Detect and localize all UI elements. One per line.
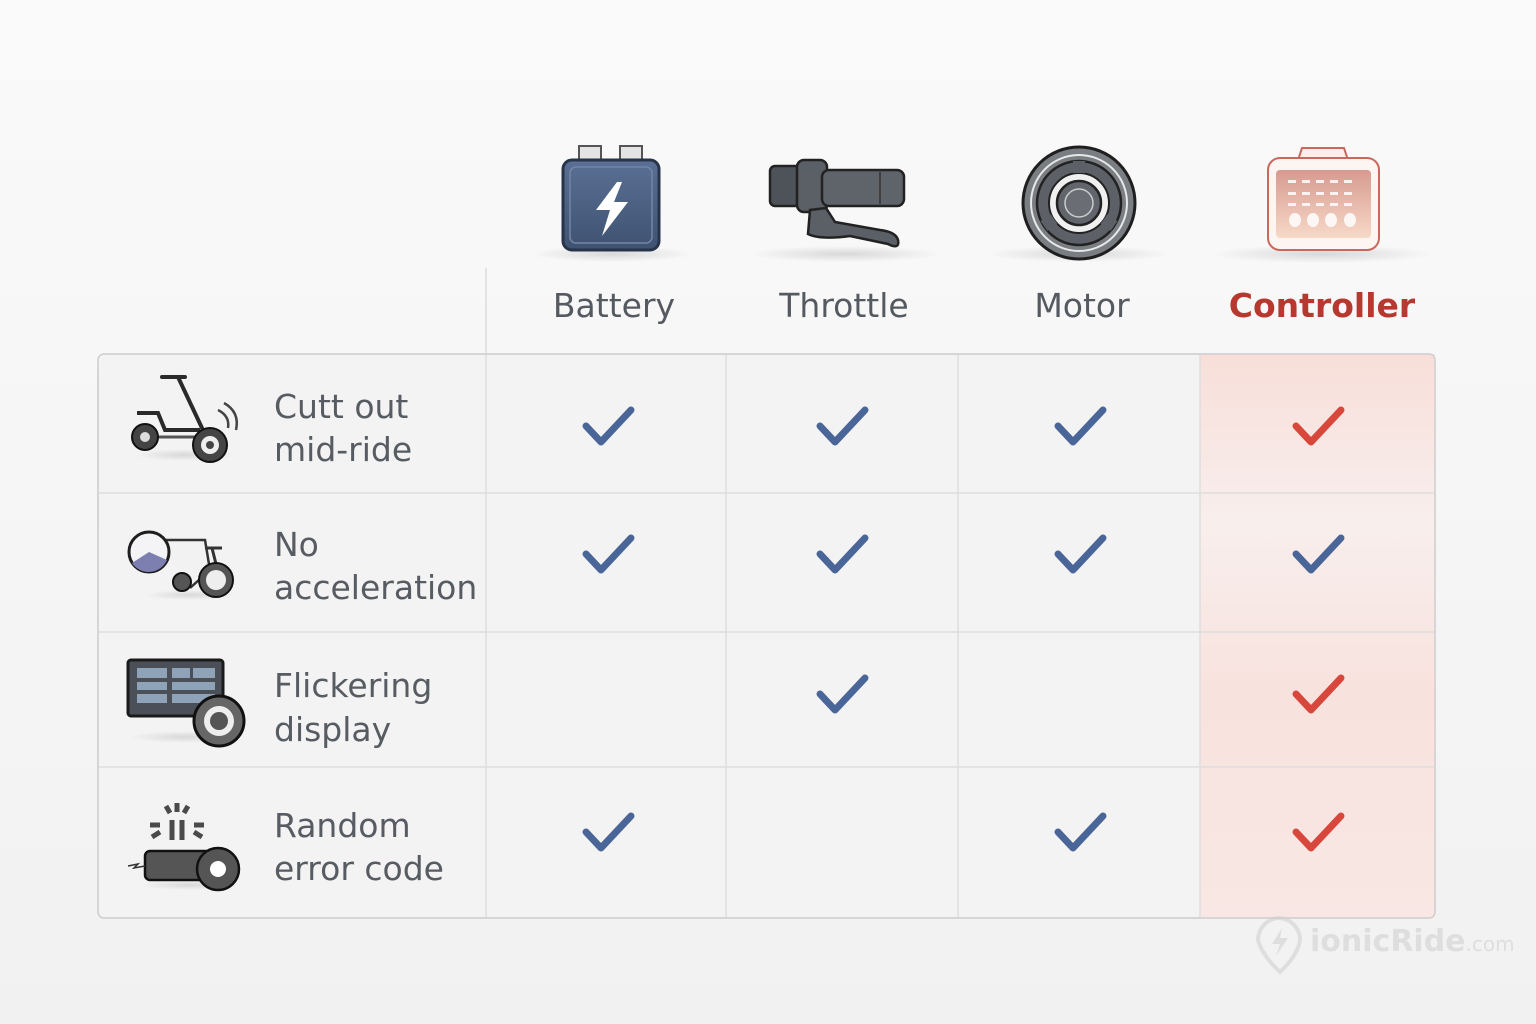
row icon: display: [128, 660, 244, 746]
icon: throttle: [750, 160, 940, 262]
header labels: [553, 286, 1416, 325]
row labels: display: [274, 710, 391, 749]
icon: motor: [988, 147, 1168, 262]
checkmarks: [586, 410, 1341, 848]
table panel: [98, 354, 1435, 918]
watermark: ionicRide.com: [1258, 918, 1515, 972]
header labels: Motor: [1034, 286, 1130, 325]
header labels: Controller: [1229, 286, 1416, 325]
row labels: Cutt out: [274, 387, 408, 426]
row labels: Random: [274, 806, 411, 845]
row labels: error code: [274, 849, 444, 888]
row labels: No: [274, 525, 319, 564]
row labels: mid-ride: [274, 430, 412, 469]
icon: battery: [532, 146, 692, 262]
row labels: [274, 387, 477, 888]
row labels: acceleration: [274, 568, 477, 607]
header: vertical divider line: [485, 268, 487, 354]
row icon: error code: [128, 803, 240, 890]
icon: controller: [1212, 148, 1432, 263]
header labels: Throttle: [778, 286, 909, 325]
row icon: no acceleration: [129, 532, 235, 600]
watermark: ionicRide.com: ionicRide.com: [1310, 924, 1515, 959]
header labels: Battery: [553, 286, 675, 325]
row labels: Flickering: [274, 666, 432, 705]
row icon: scooter: [132, 377, 237, 462]
